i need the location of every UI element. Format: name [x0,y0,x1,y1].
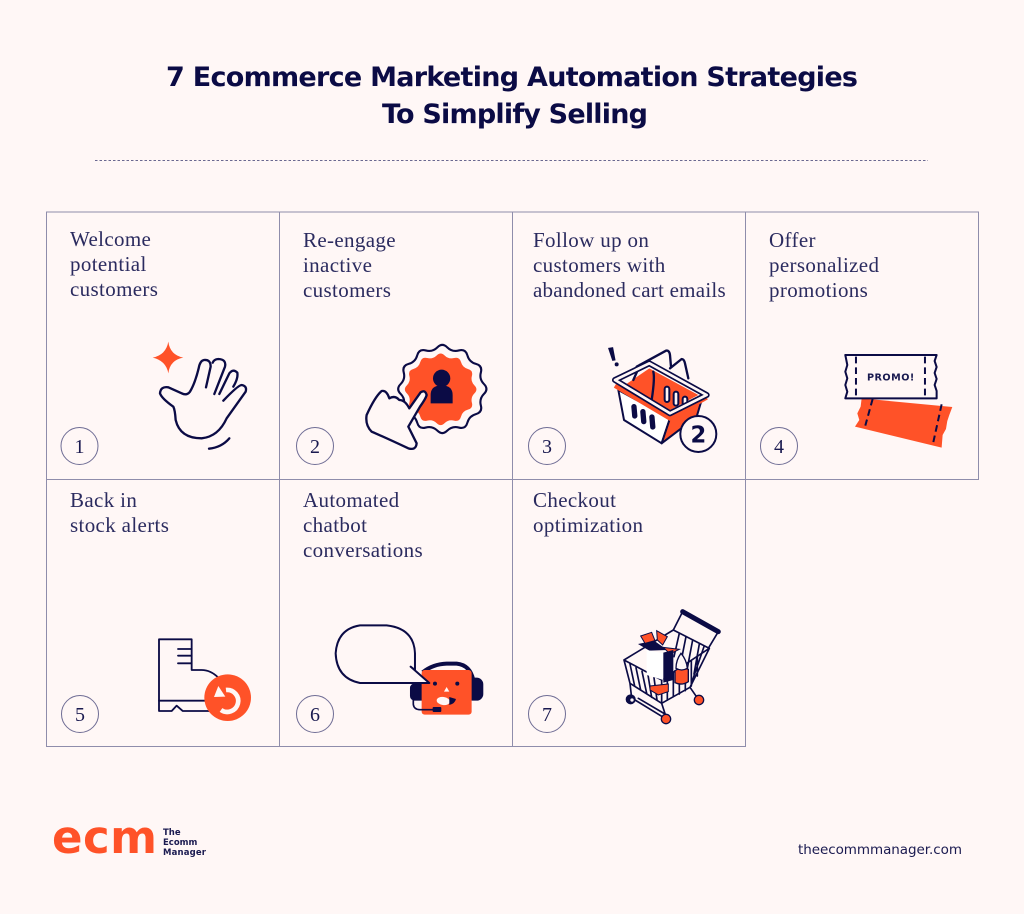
heading: offer: personalized [769,253,879,277]
heading: offer: Offer [769,228,816,252]
panel: 2 re-engage inactive customers [280,212,512,480]
heading: back in stock: Back in [70,488,137,512]
icon: shopping basket: 2 [690,422,706,448]
logo: ecm The Ecomm Manager: Ecomm [163,838,198,848]
number 7 [528,696,566,732]
heading: welcome: customers [70,277,158,301]
website url: theecommmanager.com [798,842,962,858]
title [166,62,858,130]
heading: welcome [70,227,158,301]
heading: follow up: Follow up on [533,228,649,252]
heading: re-engage: Re-engage [303,228,396,252]
icon: waving hand [153,342,246,449]
heading: re-engage: inactive [303,253,372,277]
heading: checkout: Checkout [533,488,616,512]
heading: welcome: Welcome [70,227,151,251]
heading: re-engage: customers [303,278,391,302]
heading: follow up [533,228,726,302]
number 3 [528,428,566,464]
panel: 3 abandoned cart emails [512,212,746,480]
number 6 [296,696,334,732]
logo: ecm The Ecomm Manager: Manager [163,848,207,858]
title: 7 Ecommerce Marketing Automation Strategies [166,62,858,93]
icon: badge with pointing hand [366,345,486,449]
heading: offer: promotions [769,278,868,302]
icon: shopping cart [624,612,718,724]
logo: ecm The Ecomm Manager: ecm [52,811,157,864]
heading: chatbot: chatbot [303,513,367,537]
heading: follow up: abandoned cart emails [533,278,726,302]
number 5 [62,696,98,732]
number 4 [760,428,798,464]
heading: checkout: optimization [533,513,643,537]
number 4: 4 [774,436,784,458]
heading: back in stock [70,488,169,537]
panel: 7 checkout optimization [512,480,746,746]
heading: offer [769,228,879,302]
heading: welcome: potential [70,252,147,276]
heading: re-engage [303,228,396,302]
icon: promo tickets [845,355,952,448]
panel: 6 automated chatbot conversations [280,480,512,746]
number 6: 6 [310,704,320,726]
panel: 5 back in stock alerts [46,480,280,746]
icon: shopping basket [609,348,716,452]
number 1 [61,428,98,464]
number 5: 5 [75,704,85,726]
number 2: 2 [310,436,320,458]
number 3: 3 [542,436,552,458]
icon: boot with restock arrow [159,639,251,721]
icon: speech bubble and robot [336,625,483,715]
logo: ecm The Ecomm Manager: The [163,828,181,838]
number 1: 1 [74,436,84,458]
panel: 4 personalized promotions [746,212,978,480]
heading: checkout [533,488,643,537]
logo: ecm The Ecomm Manager [52,811,207,864]
heading: chatbot [303,488,423,562]
heading: chatbot: Automated [303,488,400,512]
icon: promo tickets: PROMO! [867,372,914,383]
heading: back in stock: stock alerts [70,513,169,537]
panel: 1 welcome potential customers [46,212,280,480]
number 2 [296,428,334,464]
heading: chatbot: conversations [303,538,423,562]
title: To Simplify Selling [382,99,648,130]
number 7: 7 [542,704,552,726]
heading: follow up: customers with [533,253,666,277]
